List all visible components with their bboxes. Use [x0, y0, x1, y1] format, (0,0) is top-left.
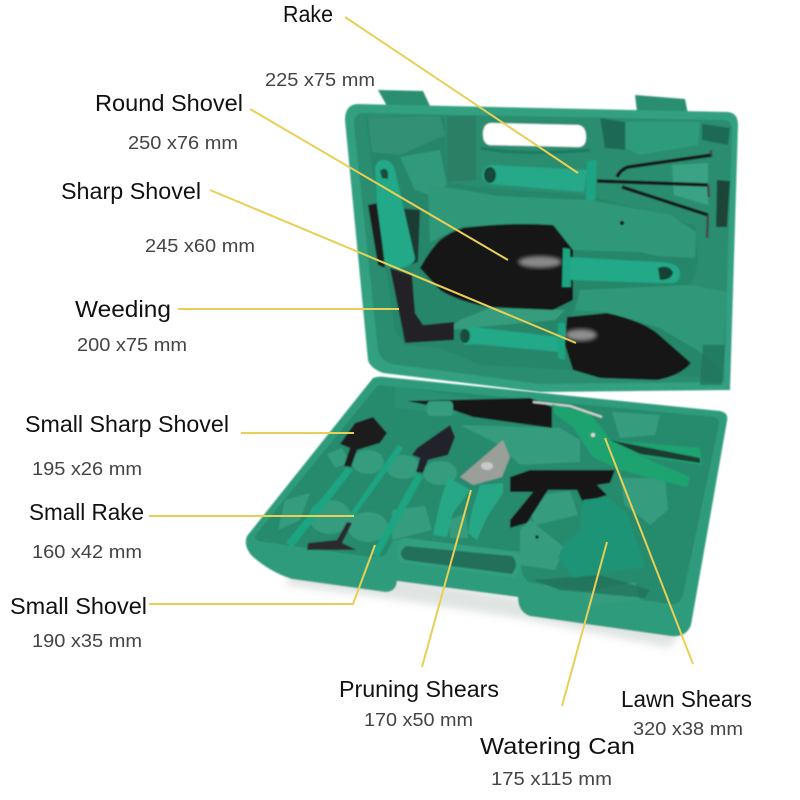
label: small sharp shovel: [25, 411, 229, 479]
tool: small shovel: [372, 425, 455, 557]
label: lawn shears: 320 x38 mm: [633, 718, 743, 739]
label: watering can: Watering Can: [480, 733, 635, 759]
label: sharp shovel: 245 x60 mm: [145, 235, 255, 256]
label: weeding: 200 x75 mm: [77, 334, 187, 355]
lid shell: [345, 104, 738, 392]
label: pruning shears: 170 x50 mm: [364, 709, 473, 730]
leader: small sharp shovel: [241, 432, 354, 434]
tray centre pin: [535, 535, 539, 539]
label: rake: 225 x75 mm: [265, 69, 375, 90]
tool: round shovel: [420, 224, 680, 310]
tray shell: [246, 377, 727, 636]
label: watering can: [480, 733, 635, 789]
label: pruning shears: [339, 676, 499, 730]
tool: lawn shears: [407, 398, 702, 487]
open tool case, lower tray: [246, 221, 727, 648]
label: sharp shovel: Sharp Shovel: [61, 178, 201, 204]
label: small shovel: [10, 593, 147, 651]
tool: small sharp shovel: [286, 417, 387, 547]
lid recess shading: [366, 116, 730, 385]
leader: sharp shovel: [210, 190, 576, 343]
open tool case, upper lid: [345, 90, 738, 392]
tool: sharp shovel: [460, 313, 691, 380]
label: lawn shears: Lawn Shears: [621, 686, 752, 712]
leader: round shovel: [250, 109, 508, 260]
yellow leader lines: [149, 17, 693, 706]
label: small sharp shovel: Small Sharp Shovel: [25, 411, 229, 437]
tool: small rake: [307, 445, 403, 550]
label: rake: [265, 1, 375, 90]
label: small shovel: 190 x35 mm: [32, 630, 142, 651]
leader: small rake: [149, 515, 354, 517]
leader: weeding: [178, 308, 399, 310]
label: sharp shovel: [61, 178, 255, 256]
label: watering can: 175 x115 mm: [491, 768, 612, 789]
tray soft shadow: [285, 560, 685, 648]
tool: weeding fork: [368, 160, 454, 343]
label: small shovel: Small Shovel: [10, 593, 147, 619]
label: weeding: [75, 296, 187, 355]
tool: pruning shears: [433, 440, 510, 540]
leader: rake: [345, 17, 578, 173]
lid centre pin: [620, 221, 624, 225]
tray handle recess: [397, 538, 520, 578]
label: small rake: Small Rake: [29, 499, 144, 525]
tray inner floor: [255, 385, 719, 604]
label: lawn shears: [621, 686, 752, 739]
handle cut-out: [483, 123, 586, 147]
tray moulded supports: [278, 386, 668, 605]
label: round shovel: 250 x76 mm: [128, 132, 238, 153]
tool: watering can: [510, 470, 650, 598]
label: pruning shears: Pruning Shears: [339, 676, 499, 702]
label: round shovel: [95, 90, 243, 153]
label: weeding: Weeding: [75, 296, 171, 322]
lid hinge tabs: [378, 90, 688, 114]
label: small rake: 160 x42 mm: [32, 541, 142, 562]
label: small rake: [29, 499, 144, 562]
leader: watering can: [562, 542, 607, 706]
label: round shovel: Round Shovel: [95, 90, 243, 116]
leader: lawn shears: [605, 438, 693, 664]
tool: rake: [482, 150, 730, 238]
label: small sharp shovel: 195 x26 mm: [32, 458, 142, 479]
leader: small shovel: [149, 545, 375, 604]
leader: pruning shears: [422, 490, 471, 667]
label: rake: Rake: [283, 1, 333, 27]
